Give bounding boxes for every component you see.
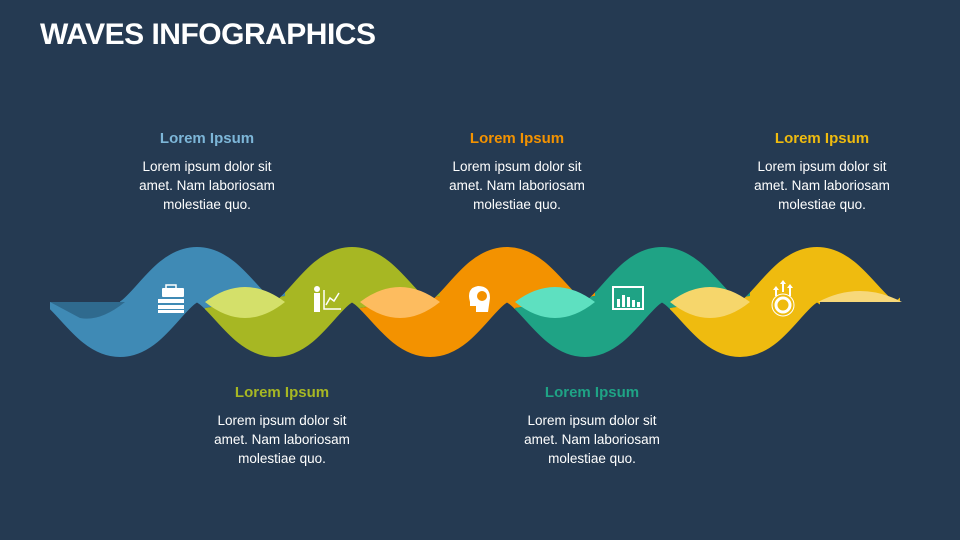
text block 2: Lorem Ipsum bbox=[235, 384, 329, 401]
text block 5 bbox=[754, 130, 890, 212]
icon: chart board bbox=[613, 287, 643, 309]
text block 4: amet. Nam laboriosam bbox=[524, 432, 660, 447]
lens: light yellow bbox=[670, 287, 750, 318]
text block 3: molestiae quo. bbox=[473, 197, 561, 212]
text block 1: molestiae quo. bbox=[163, 197, 251, 212]
text block 5: Lorem ipsum dolor sit bbox=[757, 159, 887, 174]
text block 1: Lorem Ipsum bbox=[160, 130, 254, 147]
text block 4: Lorem Ipsum bbox=[545, 384, 639, 401]
left tail bbox=[50, 302, 125, 319]
segment: blue bbox=[50, 247, 285, 357]
wave ribbon bbox=[50, 247, 902, 357]
title: WAVES INFOGRAPHICS bbox=[40, 18, 375, 51]
lens: light teal bbox=[515, 287, 595, 318]
text block 1 bbox=[139, 130, 275, 212]
lens: light green bbox=[205, 287, 285, 318]
text block 1: Lorem ipsum dolor sit bbox=[142, 159, 272, 174]
segment: yellow bbox=[670, 247, 900, 357]
text block 1: amet. Nam laboriosam bbox=[139, 178, 275, 193]
text block 3: Lorem ipsum dolor sit bbox=[452, 159, 582, 174]
text block 2: molestiae quo. bbox=[238, 451, 326, 466]
lens: light orange bbox=[360, 287, 440, 318]
text block 4: Lorem ipsum dolor sit bbox=[527, 413, 657, 428]
text block 3: Lorem Ipsum bbox=[470, 130, 564, 147]
text block 2: amet. Nam laboriosam bbox=[214, 432, 350, 447]
text block 5: Lorem Ipsum bbox=[775, 130, 869, 147]
right tail bbox=[818, 291, 902, 302]
text block 4 bbox=[524, 384, 660, 466]
segment: green bbox=[205, 247, 440, 357]
text block 5: amet. Nam laboriosam bbox=[754, 178, 890, 193]
icon: gear with arrows bbox=[772, 280, 794, 316]
segment: teal bbox=[515, 247, 750, 357]
text block 3 bbox=[449, 130, 585, 212]
text block 4: molestiae quo. bbox=[548, 451, 636, 466]
text block 5: molestiae quo. bbox=[778, 197, 866, 212]
icon: head with bulb bbox=[469, 286, 490, 312]
text block 2 bbox=[214, 384, 350, 466]
segment: orange bbox=[360, 247, 595, 357]
icon: businessman with chart bbox=[314, 286, 341, 312]
icon: briefcase on books bbox=[158, 285, 184, 313]
text block 3: amet. Nam laboriosam bbox=[449, 178, 585, 193]
text block 2: Lorem ipsum dolor sit bbox=[217, 413, 347, 428]
